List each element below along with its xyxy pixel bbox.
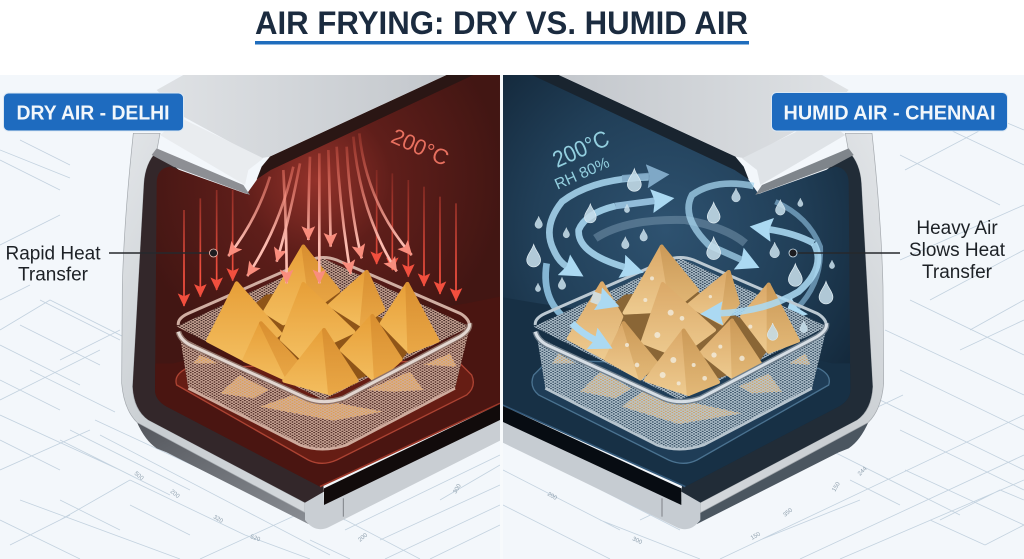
callout: heavy air slows heat transfer <box>789 218 1006 283</box>
dark base of fryer <box>137 422 322 524</box>
heated floor tray <box>176 360 473 463</box>
blueprint background: 150 <box>750 531 762 542</box>
water droplets <box>527 169 835 340</box>
basket front mesh with crumbs <box>537 333 825 449</box>
basket front rim outline <box>178 323 469 402</box>
basket back mesh pattern <box>177 258 470 400</box>
mirrored fryer shell <box>499 75 884 529</box>
temperature label: humid side: 200°C <box>549 125 613 173</box>
callout: heavy air slows heat transfer: Heavy Air <box>916 218 998 239</box>
callout: heavy air slows heat transfer: Slows Heat <box>909 240 1006 261</box>
red interior walls <box>155 75 500 368</box>
title underline <box>255 41 749 44</box>
blueprint background: 520 <box>249 534 261 544</box>
hood front strip <box>742 132 845 185</box>
callout: heavy air slows heat transfer: Transfer <box>922 262 993 283</box>
hood front strip <box>160 118 263 185</box>
dark door seal <box>681 152 873 503</box>
blueprint background: 200 <box>357 532 369 544</box>
heat arrows curved <box>228 133 412 283</box>
black slot <box>324 404 500 505</box>
blueprint background: 350 <box>782 507 794 519</box>
left panel: dry air fryer (Delhi) <box>122 75 500 529</box>
basket front rim highlight <box>535 323 826 402</box>
samosas <box>208 247 438 393</box>
dark door seal <box>133 152 324 503</box>
silver slot divider <box>342 498 344 517</box>
humidity label: RH 80% <box>552 154 612 193</box>
heat arrows straight <box>184 170 456 306</box>
hood underside <box>755 148 854 195</box>
silver front corner <box>305 420 500 529</box>
front lip edge <box>499 403 685 487</box>
basket front rim outline <box>535 323 826 402</box>
basket back rim <box>535 257 826 328</box>
hood top <box>157 75 447 158</box>
callout: rapid heat transfer <box>5 244 218 286</box>
silver door frame <box>700 133 884 513</box>
hood underside <box>152 148 250 195</box>
condensation beads on samosas <box>625 276 752 385</box>
silver front corner <box>499 420 700 529</box>
dark base of fryer <box>684 422 869 524</box>
callout: rapid heat transfer: Transfer <box>18 264 89 286</box>
blueprint background: 244 <box>857 466 869 477</box>
blueprint background: 300 <box>453 483 463 495</box>
label: dry air <box>4 93 184 131</box>
blueprint background: 320 <box>212 515 224 525</box>
basket back mesh <box>534 258 827 400</box>
blueprint background: 150 <box>832 481 842 493</box>
silver door frame <box>122 133 305 513</box>
samosas <box>569 247 798 394</box>
front ribbons of air <box>549 176 818 340</box>
blueprint background: 200 <box>169 489 181 500</box>
blueprint background: 300 <box>631 536 643 546</box>
basket back mesh pattern <box>534 258 827 400</box>
front lip edge <box>320 403 500 487</box>
divider <box>500 75 503 559</box>
basket back rim <box>178 257 469 328</box>
basket front mesh with crumbs <box>180 333 468 449</box>
basket bottom edge <box>545 388 812 449</box>
floor of cavity <box>499 297 850 487</box>
black slot <box>499 404 681 505</box>
temperature label: dry side: 200°C <box>388 124 453 171</box>
callout: rapid heat transfer: Rapid Heat <box>5 244 101 264</box>
back ribbons of air <box>546 184 820 337</box>
basket front rim highlight <box>178 323 469 402</box>
blue interior walls <box>503 75 850 364</box>
basket back mesh <box>177 258 470 400</box>
label: humid air: HUMID AIR - CHENNAI <box>784 102 996 124</box>
basket bottom edge <box>188 388 455 449</box>
floor of cavity <box>155 392 304 478</box>
blueprint background: 500 <box>133 471 145 482</box>
hood lip <box>532 75 749 179</box>
floor tray <box>532 360 829 463</box>
title: AIR FRYING: DRY VS. HUMID AIR <box>255 5 748 41</box>
silver slot divider <box>662 498 663 517</box>
hood top <box>559 75 849 158</box>
label: humid air <box>772 92 1008 131</box>
hood lip <box>257 75 473 179</box>
right panel: humid air fryer (Chennai) <box>499 75 884 529</box>
label: dry air: DRY AIR - DELHI <box>16 102 170 124</box>
blueprint background: 200 <box>546 492 558 502</box>
